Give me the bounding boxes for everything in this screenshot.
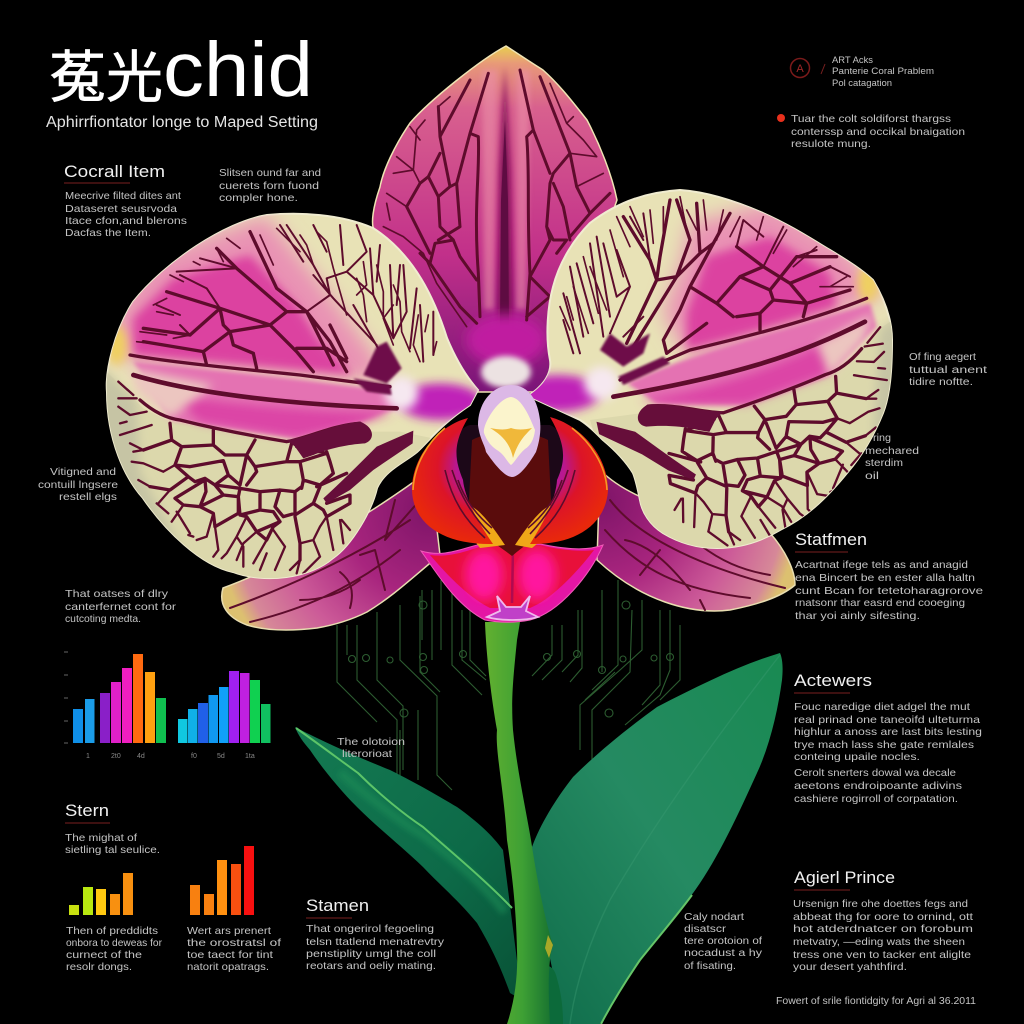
lower cream tone (590, 322, 892, 548)
text block: top note: Slitsen ound far and (219, 167, 321, 179)
text block: chart note left: onbora to deweas for (66, 937, 162, 949)
text block: Actewers: Cerolt snerters dowal wa decale (794, 767, 956, 779)
text block: Statfmen: Acartnat ifege tels as and anagid (795, 559, 968, 571)
text block: top right note: Tuar the colt soldiforst thargss (791, 113, 951, 125)
pink band (627, 303, 877, 405)
text block: chart note left: Then of preddidts (66, 925, 158, 937)
text block: Cocrall Item: Dataseret seusrvoda (65, 203, 177, 215)
text block: chart note left: curnect of the (66, 949, 142, 961)
text block: Agierl Prince (793, 868, 973, 973)
pink band (133, 362, 400, 438)
icon: red badge (790, 58, 825, 78)
callout: left: Vitigned and (50, 467, 116, 478)
callout: right lower: ring (873, 433, 891, 444)
text block: Cocrall Item (64, 162, 187, 239)
right petal (530, 189, 893, 549)
callout: left (38, 467, 119, 503)
text block: Cocrall Item: Meecrive filted dites ant (65, 190, 181, 202)
callout: right upper: tuttual anent (909, 365, 987, 376)
bar chart: rainbow pair (64, 652, 270, 760)
text block: chart intro: cutcoting medta. (65, 613, 141, 625)
text block: Agierl Prince: your desert yahthfird. (793, 961, 907, 973)
title: 菟光 (49, 46, 163, 109)
bar chart: rainbow pair: 1ta (245, 753, 255, 760)
orchid flower (100, 46, 910, 630)
text block: Agierl Prince: hot atderdnatcer on forobum (793, 923, 973, 935)
label: center: literorioat (342, 748, 392, 760)
text block: chart note right: the orostratsl of (187, 937, 281, 949)
text block: Cocrall Item: Itace cfon,and blerons (65, 215, 187, 227)
text block: chart intro: That oatses of dlry (65, 588, 169, 600)
label: center (337, 736, 405, 760)
callout: left: restell elgs (59, 492, 117, 503)
subtitle: Aphirrfiontator longe to Maped Setting (46, 114, 318, 131)
text block: top note: cuerets forn fuond (219, 180, 319, 192)
text block: Stern (65, 801, 160, 856)
text block: Statfmen: thar yoi ainly sifesting. (795, 610, 920, 622)
upper wedge (600, 333, 670, 385)
callout: right upper: Of fing aegert (909, 352, 976, 363)
column anther (484, 397, 535, 465)
text block: Stern: sietling tal seulice. (65, 844, 160, 856)
text block: Actewers: Actewers (794, 671, 872, 690)
text block: top note (219, 167, 321, 204)
text block: Actewers: highlur a anoss are last bits lesting (794, 726, 982, 738)
text block: chart note right: Wert ars prenert (187, 925, 271, 937)
text block: Actewers: conteing upaile nocles. (794, 751, 920, 763)
lower cream tone (106, 373, 430, 578)
callout: right lower (865, 433, 919, 482)
lip: lower lobe (421, 544, 603, 622)
text block: Agierl Prince: abbeat thg for oore to ornind, ott (793, 911, 973, 923)
upper wedge (353, 342, 402, 395)
text block: Agierl Prince: metvatry, —eding wats the sheen (793, 936, 965, 948)
text block: Actewers: Fouc naredige diet adgel the mut (794, 701, 970, 713)
text block: top note: compler hone. (219, 192, 298, 204)
label: near leaf (684, 912, 762, 972)
text block: chart note right (187, 925, 281, 973)
text block: Stamen lower: That ongerirol fegoeling (306, 923, 434, 935)
callout: right upper: tidire noftte. (909, 377, 973, 388)
bar chart: rainbow pair: 1 (86, 753, 90, 760)
leaf: left (295, 727, 522, 1000)
center glow (517, 375, 600, 412)
legend text: ART Acks (832, 55, 873, 66)
text block: chart intro (65, 588, 177, 625)
text block: top right note: resulote mung. (791, 138, 871, 150)
text block: Stamen lower: Stamen (306, 896, 369, 915)
text block: Stern: The mighat of (65, 832, 137, 844)
text block: Cocrall Item: Cocrall Item (64, 162, 165, 181)
icon: red bullet (777, 114, 785, 122)
bar chart: rainbow pair: 2t0 (111, 753, 121, 760)
upper veins main (620, 200, 867, 380)
bar chart: rainbow pair: 4d (137, 753, 145, 760)
footer: Fowert of srile fiontidgity for Agri al 36.2011 (776, 996, 976, 1007)
text block: Stern: Stern (65, 801, 109, 820)
text block: Agierl Prince: Ursenign fire ohe doettes fegs and (793, 898, 968, 910)
text block: top right note: conterssp and occikal bnaigation (791, 126, 965, 138)
bar chart: orange red (190, 846, 254, 915)
top sepal (373, 46, 617, 392)
circuit board traces (337, 580, 680, 790)
legend text: Panterie Coral Prablem (832, 66, 934, 77)
text block: chart intro: canterfernet cont for (65, 601, 177, 613)
lower net mirrored (596, 326, 888, 547)
column hood (478, 385, 540, 477)
text block: chart note left: resolr dongs. (66, 961, 132, 973)
lip: left side lobe (412, 418, 493, 544)
icon: red badge: A (796, 63, 804, 75)
lip: right side lobe (530, 417, 608, 544)
text block: Statfmen: Statfmen (795, 530, 867, 549)
lip: yellow sides (468, 505, 552, 548)
dark throat cavity (448, 425, 572, 540)
lower net (118, 382, 413, 573)
text block: top right note (791, 113, 965, 150)
bar chart: rainbow pair: 5d (217, 753, 225, 760)
sepal veins (383, 70, 610, 327)
text block: Actewers (794, 671, 982, 805)
text block: Actewers: cashiere rogirroll of corpatation. (794, 793, 958, 805)
left petal (100, 214, 482, 605)
label: near leaf: tere orotoion of (684, 936, 762, 947)
legend text: Pol catagation (832, 78, 892, 89)
center glow (398, 383, 482, 420)
callout: right upper (909, 352, 987, 388)
label: near leaf: of fisating. (684, 961, 736, 972)
legend text (832, 55, 934, 89)
text block: Cocrall Item: Dacfas the Item. (65, 227, 151, 239)
text block: Actewers: aeetons endroipoante adivins (794, 780, 962, 792)
title (49, 27, 313, 113)
text block: Statfmen: ena Bincert be en ester alla haltn (795, 572, 975, 584)
stem (485, 622, 563, 1024)
label: near leaf: nocadust a hy (684, 948, 762, 959)
text block: Statfmen: rnatsonr thar easrd end cooeging (795, 597, 965, 609)
text block: Agierl Prince: Agierl Prince (794, 868, 895, 887)
text block: Stamen lower: telsn ttatlend menatrevtry (306, 936, 445, 948)
text block: Actewers: trye mach lass she gate remlales (794, 739, 974, 751)
text block: Agierl Prince: tress one ven to tacker ent aliglte (793, 949, 971, 961)
text block: Stamen lower: penstiplity umgl the coll (306, 948, 436, 960)
callout: right lower: mechared (865, 446, 919, 457)
lower left sepal (222, 470, 440, 630)
label: center: The olotoion (337, 736, 405, 748)
label: near leaf: disatscr (684, 924, 727, 935)
text block: Actewers: real prinad one taneoifd ulteturma (794, 714, 980, 726)
title: chid (163, 27, 313, 113)
text block: Stamen lower: reotars and oeliy mating. (306, 960, 436, 972)
callout: right lower: sterdim (865, 458, 903, 469)
callout: right lower: oil (865, 471, 879, 482)
text block: Statfmen (795, 530, 983, 622)
leaf: right (532, 653, 783, 1024)
text block: chart note right: toe taect for tint (187, 949, 273, 961)
label: near leaf: Caly nodart (684, 912, 744, 923)
bar chart: yellow orange (69, 873, 133, 915)
callout: left: contuill lngsere (38, 480, 119, 491)
upper veins main (130, 232, 390, 387)
lip: throat (468, 432, 552, 556)
text block: chart note right: natorit opatrags. (187, 961, 269, 973)
bar chart: rainbow pair: f0 (191, 753, 197, 760)
pink upper zone (663, 203, 883, 357)
text block: Statfmen: cunt Bcan for tetetoharagrorove (795, 585, 983, 597)
text block: Stamen lower (306, 896, 445, 972)
lower right sepal (597, 470, 795, 611)
text block: chart note left (66, 925, 162, 973)
pink upper zone (107, 215, 393, 382)
